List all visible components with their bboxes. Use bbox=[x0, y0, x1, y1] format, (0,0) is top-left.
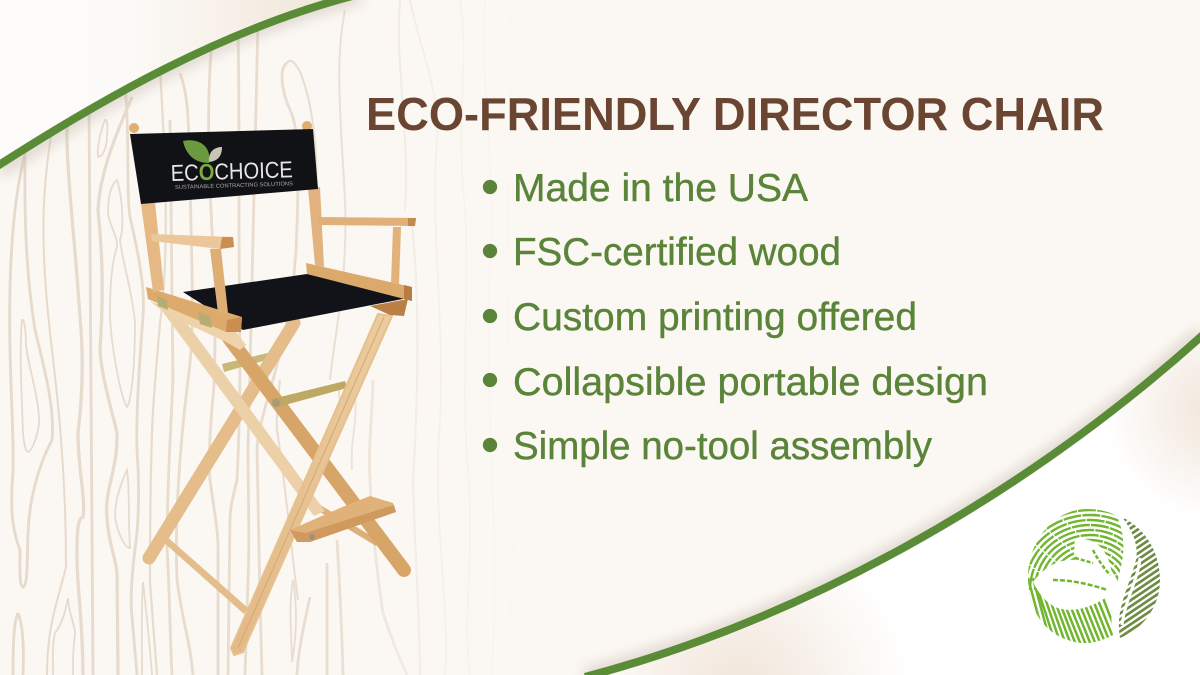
bullet: made in the USA: Made in the USA bbox=[513, 167, 808, 210]
left armrest bbox=[151, 234, 234, 249]
dark crescent bbox=[1118, 518, 1160, 638]
left arm support bbox=[210, 249, 228, 313]
hinges bbox=[157, 296, 168, 310]
feature list bbox=[483, 167, 988, 468]
rear brace bbox=[222, 350, 281, 372]
thin foot bar left bbox=[161, 534, 248, 614]
rear light leg bbox=[149, 323, 294, 558]
right arm support bbox=[391, 227, 401, 285]
chair illustration bbox=[129, 121, 416, 655]
green curve: bottom right bbox=[585, 333, 1200, 675]
fingerprint leaf logo bbox=[1028, 509, 1160, 644]
rear seat bracket bbox=[370, 299, 408, 316]
right armrest bbox=[317, 217, 416, 226]
backrest canvas bbox=[130, 129, 318, 204]
green curve: top left bbox=[0, 0, 360, 167]
left under-rail bbox=[150, 301, 246, 350]
title: ECO-FRIENDLY DIRECTOR CHAIR bbox=[366, 88, 1104, 140]
leg running down right bbox=[229, 338, 404, 570]
wood grain pattern bbox=[8, 0, 446, 675]
bullet: no-tool assembly: Simple no-tool assembly bbox=[513, 425, 932, 468]
front leg shaded edge bbox=[238, 317, 384, 648]
top-left corner panel bbox=[0, 0, 360, 169]
light leg running down right bbox=[160, 303, 325, 516]
logo wordmark: ECOCHOICE bbox=[170, 156, 293, 186]
seat canvas bbox=[183, 274, 408, 330]
bullet: custom printing: Custom printing offered bbox=[513, 296, 917, 339]
bottom-right corner panel bbox=[585, 336, 1200, 675]
logo tagline: SUSTAINABLE CONTRACTING SOLUTIONS bbox=[175, 181, 293, 191]
left seat rail bbox=[146, 287, 242, 332]
logo leaves bbox=[183, 140, 222, 163]
white leaves bbox=[1033, 560, 1113, 610]
thin rear bar bbox=[310, 500, 378, 546]
footrest bbox=[290, 496, 396, 542]
front leg bbox=[231, 314, 392, 655]
bullet: FSC-certified wood: FSC-certified wood bbox=[513, 231, 841, 274]
left back post bbox=[141, 202, 164, 292]
lower hatch mask bbox=[1029, 590, 1113, 643]
backrest knobs bbox=[129, 123, 139, 133]
front brace bbox=[272, 381, 347, 408]
bullet: collapsible design: Collapsible portable design bbox=[513, 361, 988, 404]
right back post bbox=[308, 187, 324, 267]
right seat rail bbox=[306, 263, 412, 301]
